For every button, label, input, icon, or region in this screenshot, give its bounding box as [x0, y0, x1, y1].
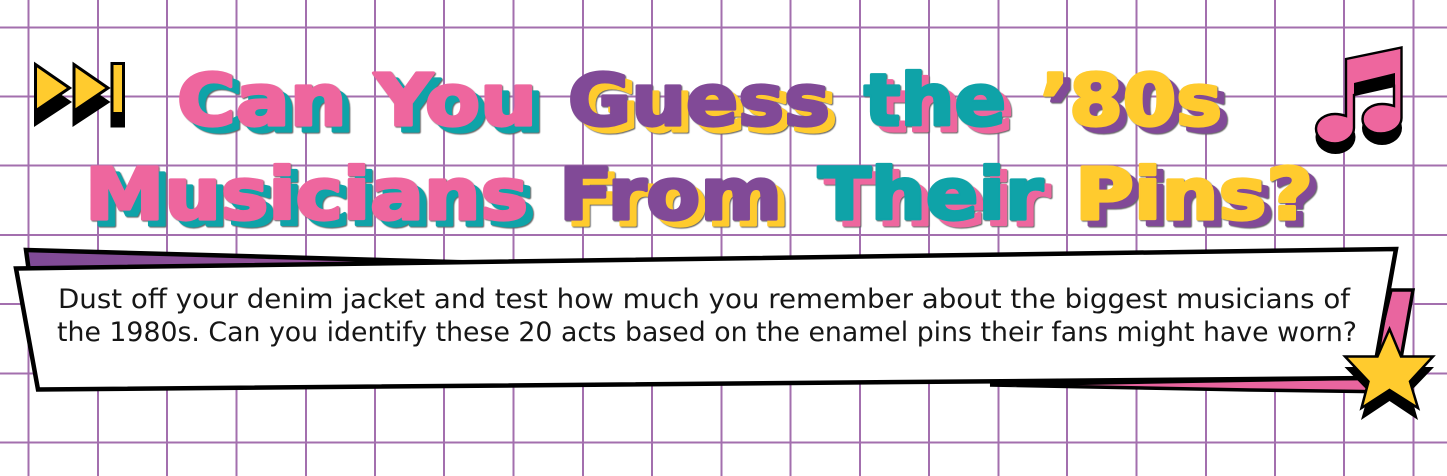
title line 1: ’80s [1040, 59, 1222, 142]
panel: back purple flap [26, 250, 490, 272]
title [85, 59, 1313, 236]
title line 2: From [559, 153, 782, 236]
intro text [57, 284, 1357, 348]
title line 1: Can You [177, 59, 537, 142]
panel: back pink flap [990, 290, 1413, 392]
intro text: the 1980s. Can you identify these 20 acts based on the enamel pins their fans might have worn? [57, 317, 1357, 348]
title line 1: the [864, 59, 1006, 142]
intro text: Dust off your denim jacket and test how much you remember about the biggest musicians of [58, 284, 1351, 315]
title line 2: Their [818, 153, 1043, 236]
panel: intro box [16, 249, 1396, 390]
title line 1: Guess [568, 59, 830, 142]
title line 2 [85, 153, 1313, 236]
icon: star [1344, 329, 1434, 420]
title line 2: Musicians [85, 153, 528, 236]
icon: fast forward [34, 64, 125, 128]
title line 2: Pins? [1075, 153, 1313, 236]
icon: music notes [1316, 48, 1402, 154]
title line 1 [177, 59, 1222, 142]
